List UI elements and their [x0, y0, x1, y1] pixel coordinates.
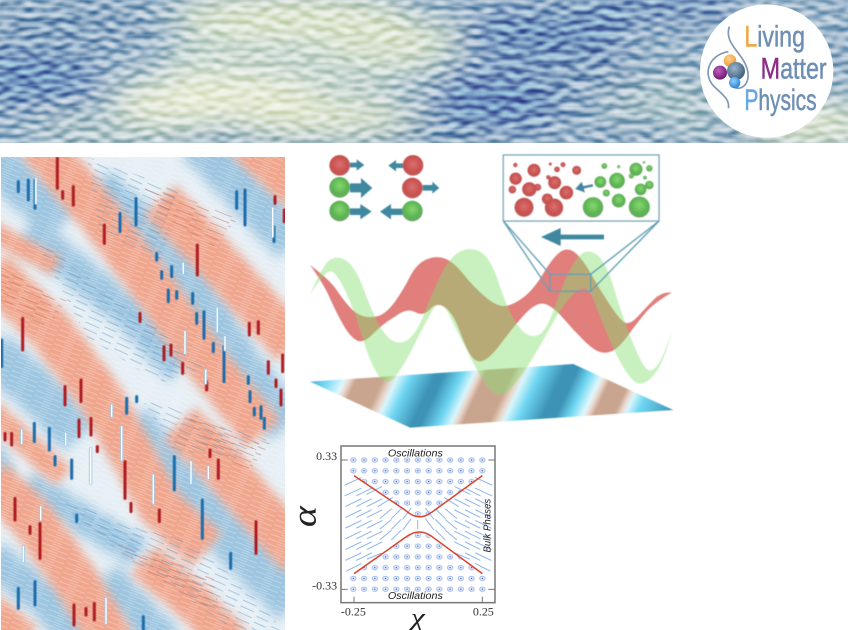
zoom lines and selection box — [503, 221, 659, 291]
banner: rippled surface — [0, 0, 848, 150]
red wave sheet — [310, 250, 672, 361]
tick marks — [341, 460, 495, 603]
chart: phase diagram — [286, 446, 495, 630]
red particles — [329, 155, 423, 198]
red bands — [1, 157, 285, 630]
y axis min: -0.33 — [312, 578, 337, 592]
inset red particles — [508, 162, 581, 217]
blue bands — [0, 140, 297, 630]
region label: bottom oscillations: Oscillations — [388, 591, 443, 602]
green wave sheet — [310, 249, 673, 394]
bottom plane: concentration stripes — [310, 364, 673, 428]
region label: top oscillations: Oscillations — [388, 449, 443, 460]
oscillation region markers — [348, 454, 489, 595]
red phase boundaries — [354, 476, 482, 574]
panel: red and blue simulation field — [1, 157, 285, 630]
inset: particle close-up — [503, 155, 659, 221]
dark blue drips — [2, 180, 274, 630]
logo: Living Matter Physics — [700, 4, 833, 138]
inset green particles — [583, 161, 654, 218]
logo icon: molecules and helix — [708, 27, 748, 108]
green particles — [329, 177, 423, 221]
fine diagonal streaks — [0, 150, 287, 630]
inset arrow — [575, 182, 593, 193]
y axis symbol: α — [286, 505, 323, 527]
red-red and red-green arrows — [350, 159, 439, 219]
arrow: wave travel direction — [547, 232, 604, 242]
x axis min: -0.25 — [341, 604, 366, 618]
logo word: Physics: Physics — [744, 84, 817, 117]
dark red drips — [5, 158, 284, 625]
bulk phase line markers — [345, 478, 492, 571]
logo word: Living: Living — [744, 21, 805, 54]
logo word: Matter: Matter — [761, 52, 827, 85]
particle interaction legend — [329, 155, 439, 221]
pale drips — [22, 178, 273, 623]
x axis max: 0.25 — [473, 604, 494, 618]
region label: bulk phases: Bulk Phases — [482, 499, 493, 553]
y axis max: 0.33 — [316, 449, 337, 463]
figure: interacting species waves — [310, 155, 673, 428]
